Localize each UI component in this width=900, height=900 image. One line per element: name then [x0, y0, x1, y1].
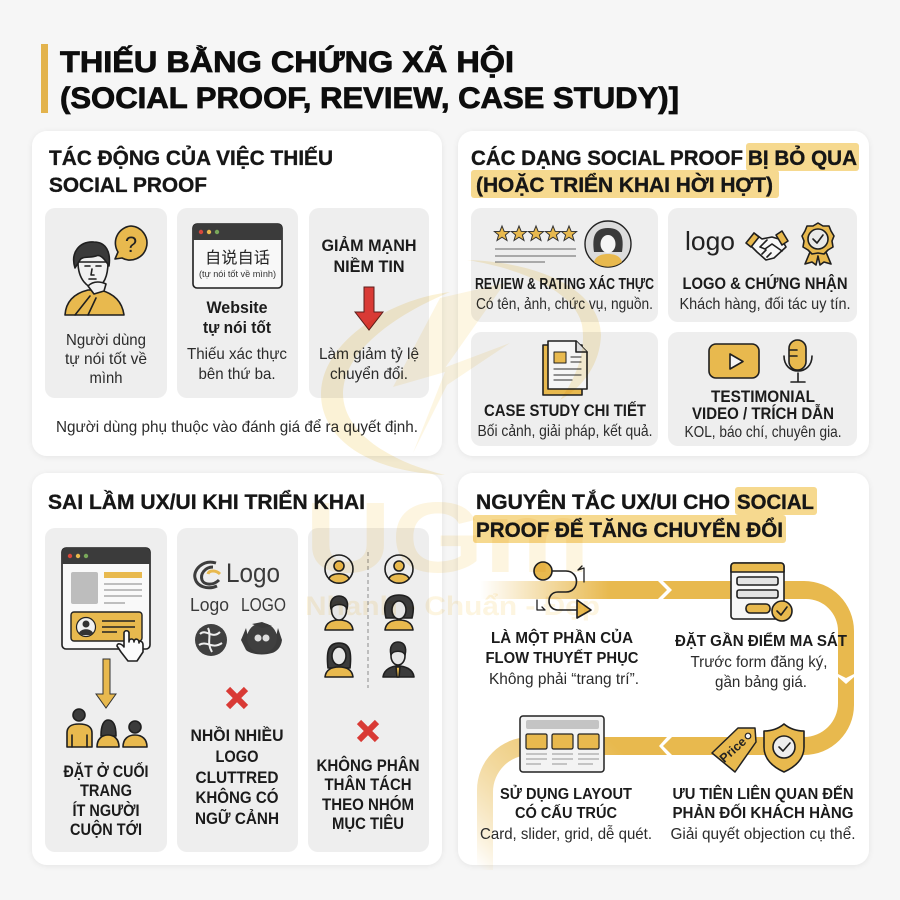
- title accent bar: [41, 44, 48, 113]
- text: user self-praise: [65, 332, 147, 387]
- heading: principles: [473, 487, 817, 543]
- text: reduced trust: [322, 236, 416, 276]
- text: friction point: ĐẶT GẦN ĐIỂM MA SÁT: [675, 632, 848, 650]
- card: review and rating: [471, 208, 658, 322]
- icon: reviewer avatar: [585, 221, 631, 267]
- text: structured layout: CÓ CẤU TRÚC: [515, 804, 617, 822]
- card: testimonial: [668, 332, 857, 446]
- text: reduced trust: NIỀM TIN: [334, 257, 404, 276]
- icon: red cross: [359, 722, 377, 740]
- icon: abstract round logo: [195, 624, 227, 656]
- icon: group of people: [67, 709, 147, 747]
- icon: avatar left circle: [325, 555, 353, 583]
- icon: man: [325, 596, 353, 630]
- card: website self-praise: [177, 208, 298, 398]
- icon: price tag: Price: [717, 735, 749, 765]
- text: reduced trust: GIẢM MẠNH: [322, 236, 416, 255]
- text: objection relevance: Giải quyết objection cụ thể.: [670, 825, 856, 843]
- icon: hand cursor: [117, 631, 143, 661]
- text: no segmentation: THEO NHÓM: [322, 795, 414, 814]
- logo wordmarks: [190, 558, 286, 615]
- heading: ignored types: (HOẶC TRIỂN KHAI HỜI HỢT): [476, 172, 773, 197]
- icon: businessman: [383, 642, 414, 677]
- icon: swirl logo: [195, 562, 220, 588]
- text: user self-praise: Người dùng: [66, 332, 146, 349]
- text: placed at bottom: TRANG: [80, 781, 132, 800]
- text: placed at bottom: CUỘN TỚI: [70, 820, 142, 839]
- text: review and rating: REVIEW & RATING XÁC THỰC: [475, 276, 654, 293]
- text: cluttered logos: NHỒI NHIỀU: [190, 726, 284, 745]
- text: case study: CASE STUDY CHI TIẾT: [484, 401, 647, 420]
- icon: red cross: [228, 689, 246, 707]
- text: placed at bottom: [64, 761, 148, 839]
- text: objection relevance: [670, 785, 856, 843]
- icon: browser window: (tự nói tốt về mình): [199, 269, 276, 280]
- icon: card layout: [520, 716, 604, 772]
- heading: ignored types: CÁC DẠNG SOCIAL PROOF: [471, 145, 743, 170]
- icon: woman short hair: [385, 595, 413, 630]
- text: objection relevance: PHẢN ĐỐI KHÁCH HÀNG: [672, 804, 854, 822]
- card: cluttered logos: [177, 528, 298, 852]
- icon: persuasion flow: [534, 562, 591, 618]
- text: user self-praise: tự nói tốt về: [65, 351, 147, 368]
- icon: five stars: [494, 226, 577, 240]
- text: case study: [478, 401, 652, 440]
- text: logo and certification: LOGO & CHỨNG NHẬN: [682, 274, 848, 293]
- text: website self-praise: bên thứ ba.: [198, 366, 276, 383]
- arrow: down yellow: [96, 659, 116, 708]
- flow path band: [477, 581, 854, 870]
- text: no segmentation: THÂN TÁCH: [324, 775, 412, 794]
- heading: impact: TÁC ĐỘNG CỦA VIỆC THIẾU: [49, 145, 333, 170]
- text: logo and certification: [680, 274, 850, 313]
- title block: [41, 44, 679, 115]
- text: conversion decrease: Làm giảm tỷ lệ: [319, 346, 419, 363]
- text: reliance note: Người dùng phụ thuộc vào đánh giá để ra quyết định.: [56, 418, 418, 436]
- text: review and rating: Có tên, ảnh, chức vụ, nguồn.: [476, 296, 653, 313]
- heading: principles: PROOF ĐỂ TĂNG CHUYỂN ĐỔI: [476, 517, 783, 542]
- text: structured layout: Card, slider, grid, dễ quét.: [480, 824, 652, 843]
- watermark: UGm: [305, 482, 590, 594]
- text: testimonial: [684, 387, 842, 441]
- text: testimonial: KOL, báo chí, chuyên gia.: [684, 424, 842, 441]
- text: persuasion flow: [486, 629, 639, 688]
- heading: principles: NGUYÊN TẮC UX/UI CHO: [476, 489, 730, 514]
- panel: UX/UI principles: [458, 473, 869, 870]
- text: persuasion flow: Không phải “trang trí”.: [489, 671, 639, 688]
- card: detailed case study: [471, 332, 658, 446]
- icon: browser window: 自说自话: [205, 249, 270, 267]
- text: cluttered logos: [190, 726, 284, 828]
- card: logo and certification: [668, 208, 857, 322]
- text: cluttered logos: KHÔNG CÓ: [196, 788, 278, 807]
- text: cluttered logos: CLUTTRED: [196, 768, 278, 787]
- text: cluttered logos: LOGO: [216, 747, 258, 766]
- title: (SOCIAL PROOF, REVIEW, CASE STUDY)]: [60, 82, 679, 115]
- text: friction point: [675, 632, 848, 691]
- text: website self-praise: Thiếu xác thực: [187, 346, 287, 363]
- text: structured layout: SỬ DỤNG LAYOUT: [500, 785, 632, 803]
- text: no segmentation: MỤC TIÊU: [332, 814, 404, 833]
- text: friction point: Trước form đăng ký,: [690, 654, 828, 671]
- card: user self-praise: [45, 208, 167, 398]
- icon: question bubble: ?: [125, 232, 137, 257]
- text: website self-praise: tự nói tốt: [203, 318, 271, 337]
- icon: document: [543, 341, 587, 395]
- icon: owl logo: [241, 622, 282, 654]
- heading: principles: SOCIAL: [737, 490, 814, 514]
- title: [60, 45, 679, 115]
- card: sharply reduced trust: [309, 208, 429, 398]
- text: persuasion flow: LÀ MỘT PHẦN CỦA: [491, 629, 633, 647]
- arrow: down red: [355, 287, 383, 330]
- heading: ignored types: BỊ BỎ QUA: [748, 145, 857, 170]
- panel: UX/UI mistakes: [32, 473, 442, 865]
- icon: award badge: [802, 223, 834, 265]
- heading: impact: [49, 145, 333, 197]
- text: no segmentation: [316, 756, 420, 833]
- icon: question bubble: [115, 226, 147, 260]
- icon: microphone: [784, 340, 812, 382]
- text: website self-praise: [187, 298, 287, 383]
- icon: handshake: [746, 231, 788, 260]
- watermark: Nhanh - Chuẩn - Đẹp: [305, 591, 600, 621]
- text: structured layout: [480, 785, 652, 843]
- panel: ignored social proof types: [458, 131, 869, 456]
- title: THIẾU BẰNG CHỨNG XÃ HỘI: [60, 45, 514, 79]
- icon: page wireframe: [62, 548, 150, 649]
- text: no segmentation: KHÔNG PHÂN: [316, 756, 420, 775]
- icon: woman long hair: [325, 643, 353, 677]
- icon: browser window: [193, 224, 282, 288]
- heading: ignored types: [471, 143, 859, 198]
- text: user self-praise: mình: [90, 370, 122, 387]
- icon: logo word: logo: [685, 226, 735, 256]
- icon: form with check: [731, 563, 792, 621]
- icon: video play: [709, 344, 759, 378]
- text: review and rating: [475, 276, 654, 313]
- icon: review lines: [495, 249, 576, 262]
- icon: shield check: [764, 724, 804, 772]
- text: testimonial: VIDEO / TRÍCH DẪN: [692, 404, 834, 423]
- text: conversion decrease: [319, 346, 419, 383]
- icon: thinking person: [65, 242, 124, 315]
- text: case study: Bối cảnh, giải pháp, kết quả.: [478, 423, 652, 440]
- card: no audience segmentation: [308, 528, 429, 852]
- text: website self-praise: Website: [206, 298, 268, 317]
- panel: impact of missing social proof: [32, 131, 442, 456]
- heading: impact: SOCIAL PROOF: [49, 173, 207, 197]
- text: objection relevance: ƯU TIÊN LIÊN QUAN ĐẾN: [672, 785, 854, 803]
- text: placed at bottom: ĐẶT Ở CUỐI: [64, 761, 148, 781]
- text: placed at bottom: ÍT NGƯỜI: [72, 801, 140, 820]
- text: testimonial: TESTIMONIAL: [711, 387, 815, 406]
- card: placed at page bottom: [45, 528, 167, 852]
- text: persuasion flow: FLOW THUYẾT PHỤC: [486, 650, 638, 667]
- text: cluttered logos: NGỮ CẢNH: [195, 808, 279, 828]
- logo wordmarks: Logo: [190, 595, 229, 615]
- text: conversion decrease: chuyển đổi.: [330, 365, 408, 383]
- icon: price tag: [712, 728, 756, 772]
- logo wordmarks: LOGO: [241, 595, 286, 615]
- text: logo and certification: Khách hàng, đối tác uy tín.: [680, 296, 850, 313]
- heading: mistakes: SAI LẦM UX/UI KHI TRIỂN KHAI: [48, 489, 365, 514]
- logo wordmarks: Logo: [226, 558, 280, 588]
- watermark: [305, 260, 601, 621]
- icon: avatar right circle: [385, 555, 413, 583]
- text: friction point: gần bảng giá.: [715, 674, 807, 691]
